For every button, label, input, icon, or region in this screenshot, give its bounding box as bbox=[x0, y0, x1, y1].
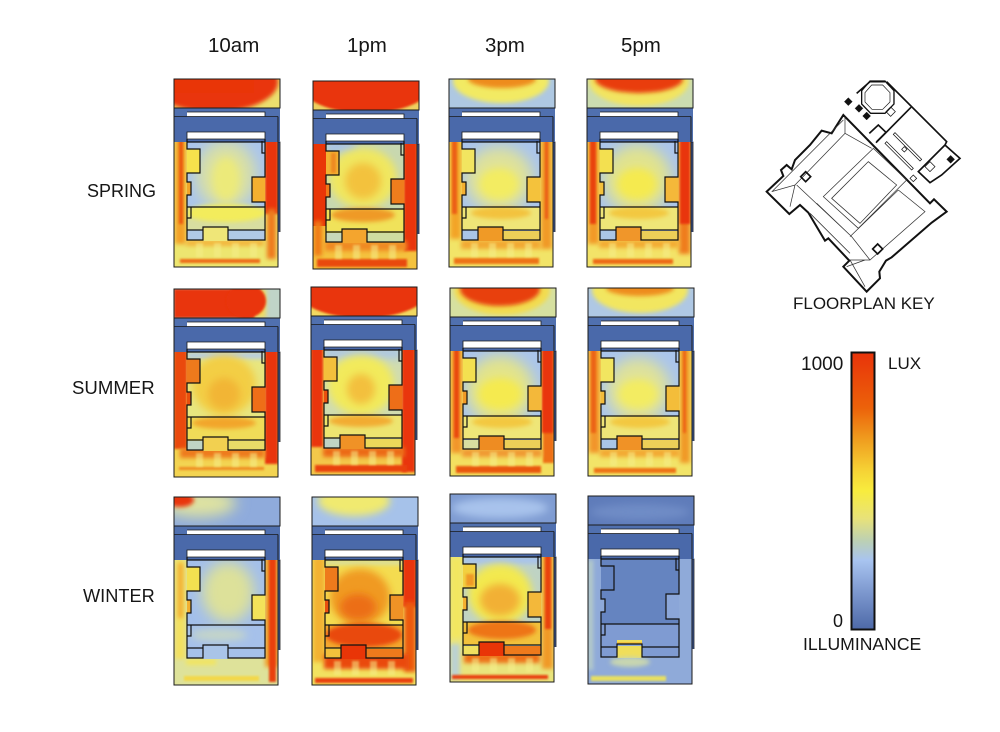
column heading: 3pm: 3pm bbox=[485, 34, 525, 57]
panel: spring 3pm bbox=[449, 59, 555, 267]
panel: summer 1pm bbox=[310, 286, 418, 476]
courtyard surround heat bbox=[449, 139, 553, 267]
legend max value: 1000 bbox=[801, 354, 843, 375]
interior heat bbox=[601, 352, 678, 448]
main hall outer walls bbox=[767, 115, 947, 292]
interior heat bbox=[463, 352, 540, 448]
legend colour bar bbox=[852, 352, 874, 630]
courtyard surround heat bbox=[587, 139, 691, 267]
panel: spring 10am bbox=[174, 78, 280, 268]
main hall inner lines bbox=[772, 117, 925, 287]
building outline bbox=[174, 497, 280, 685]
column markers bbox=[801, 172, 883, 254]
top field heat bbox=[450, 288, 556, 316]
top field heat bbox=[314, 82, 418, 110]
courtyard surround heat bbox=[312, 557, 416, 685]
courtyard surround heat bbox=[174, 557, 278, 685]
panel: winter 3pm bbox=[450, 494, 556, 682]
top field heat bbox=[174, 80, 280, 108]
courtyard surround heat bbox=[588, 559, 692, 684]
interior heat bbox=[450, 554, 554, 664]
interior heat bbox=[324, 350, 402, 448]
courtyard surround heat bbox=[450, 348, 554, 476]
panel: spring 5pm bbox=[587, 56, 693, 267]
courtyard surround heat bbox=[174, 349, 278, 477]
solid wall blocks bbox=[844, 98, 955, 163]
building outline bbox=[587, 79, 693, 267]
panel: spring 1pm bbox=[312, 80, 420, 270]
building outline bbox=[588, 288, 694, 476]
row label: spring: SPRING bbox=[87, 181, 156, 201]
top field heat bbox=[450, 494, 556, 523]
panel: winter 10am bbox=[174, 496, 280, 686]
column heading: 5pm: 5pm bbox=[621, 34, 661, 57]
panel: summer 5pm bbox=[588, 267, 694, 476]
top field heat bbox=[588, 496, 694, 525]
panel: winter 5pm bbox=[588, 496, 694, 684]
interior heat bbox=[325, 560, 402, 658]
building outline bbox=[449, 79, 555, 267]
legend min value: 0 bbox=[833, 611, 843, 631]
building outline bbox=[313, 81, 419, 269]
top field heat bbox=[312, 498, 418, 526]
panel: summer 10am bbox=[174, 284, 280, 477]
floorplan key drawing bbox=[767, 81, 960, 292]
building outline bbox=[174, 79, 280, 267]
top field heat bbox=[450, 80, 554, 108]
interior heat bbox=[187, 352, 264, 450]
building outline bbox=[450, 494, 556, 682]
interior heat bbox=[588, 556, 692, 666]
row label: winter: WINTER bbox=[83, 586, 155, 606]
interior heat bbox=[187, 560, 264, 658]
row label: summer: SUMMER bbox=[72, 377, 155, 398]
interior heat bbox=[462, 142, 540, 240]
panel: winter 1pm bbox=[312, 486, 418, 685]
legend unit: LUX bbox=[888, 354, 921, 373]
courtyard surround heat bbox=[311, 347, 415, 475]
octagonal tower bbox=[862, 81, 894, 113]
column heading: 1pm: 1pm bbox=[347, 34, 387, 57]
courtyard surround heat bbox=[313, 141, 417, 269]
chapel wing details bbox=[885, 107, 935, 182]
building outline bbox=[588, 496, 694, 684]
top field heat bbox=[174, 498, 280, 526]
top field heat bbox=[588, 288, 694, 316]
building outline bbox=[174, 289, 280, 477]
interior heat bbox=[600, 142, 678, 240]
legend title: ILLUMINANCE bbox=[803, 634, 921, 654]
top field heat bbox=[174, 290, 280, 318]
column heading: 10am: 10am bbox=[208, 34, 259, 57]
top field heat bbox=[588, 80, 692, 108]
colour legend bbox=[801, 352, 921, 654]
interior heat bbox=[187, 142, 264, 240]
interior heat bbox=[326, 144, 404, 242]
chapel wing walls bbox=[857, 82, 960, 183]
building outline bbox=[311, 287, 417, 475]
panel: summer 3pm bbox=[450, 265, 556, 476]
building outline bbox=[450, 288, 556, 476]
courtyard surround heat bbox=[174, 139, 278, 267]
courtyard surround heat bbox=[588, 348, 692, 476]
courtyard surround heat bbox=[450, 554, 554, 682]
top field heat bbox=[312, 288, 416, 316]
floorplan key label: FLOORPLAN KEY bbox=[793, 294, 935, 313]
building outline bbox=[312, 497, 418, 685]
